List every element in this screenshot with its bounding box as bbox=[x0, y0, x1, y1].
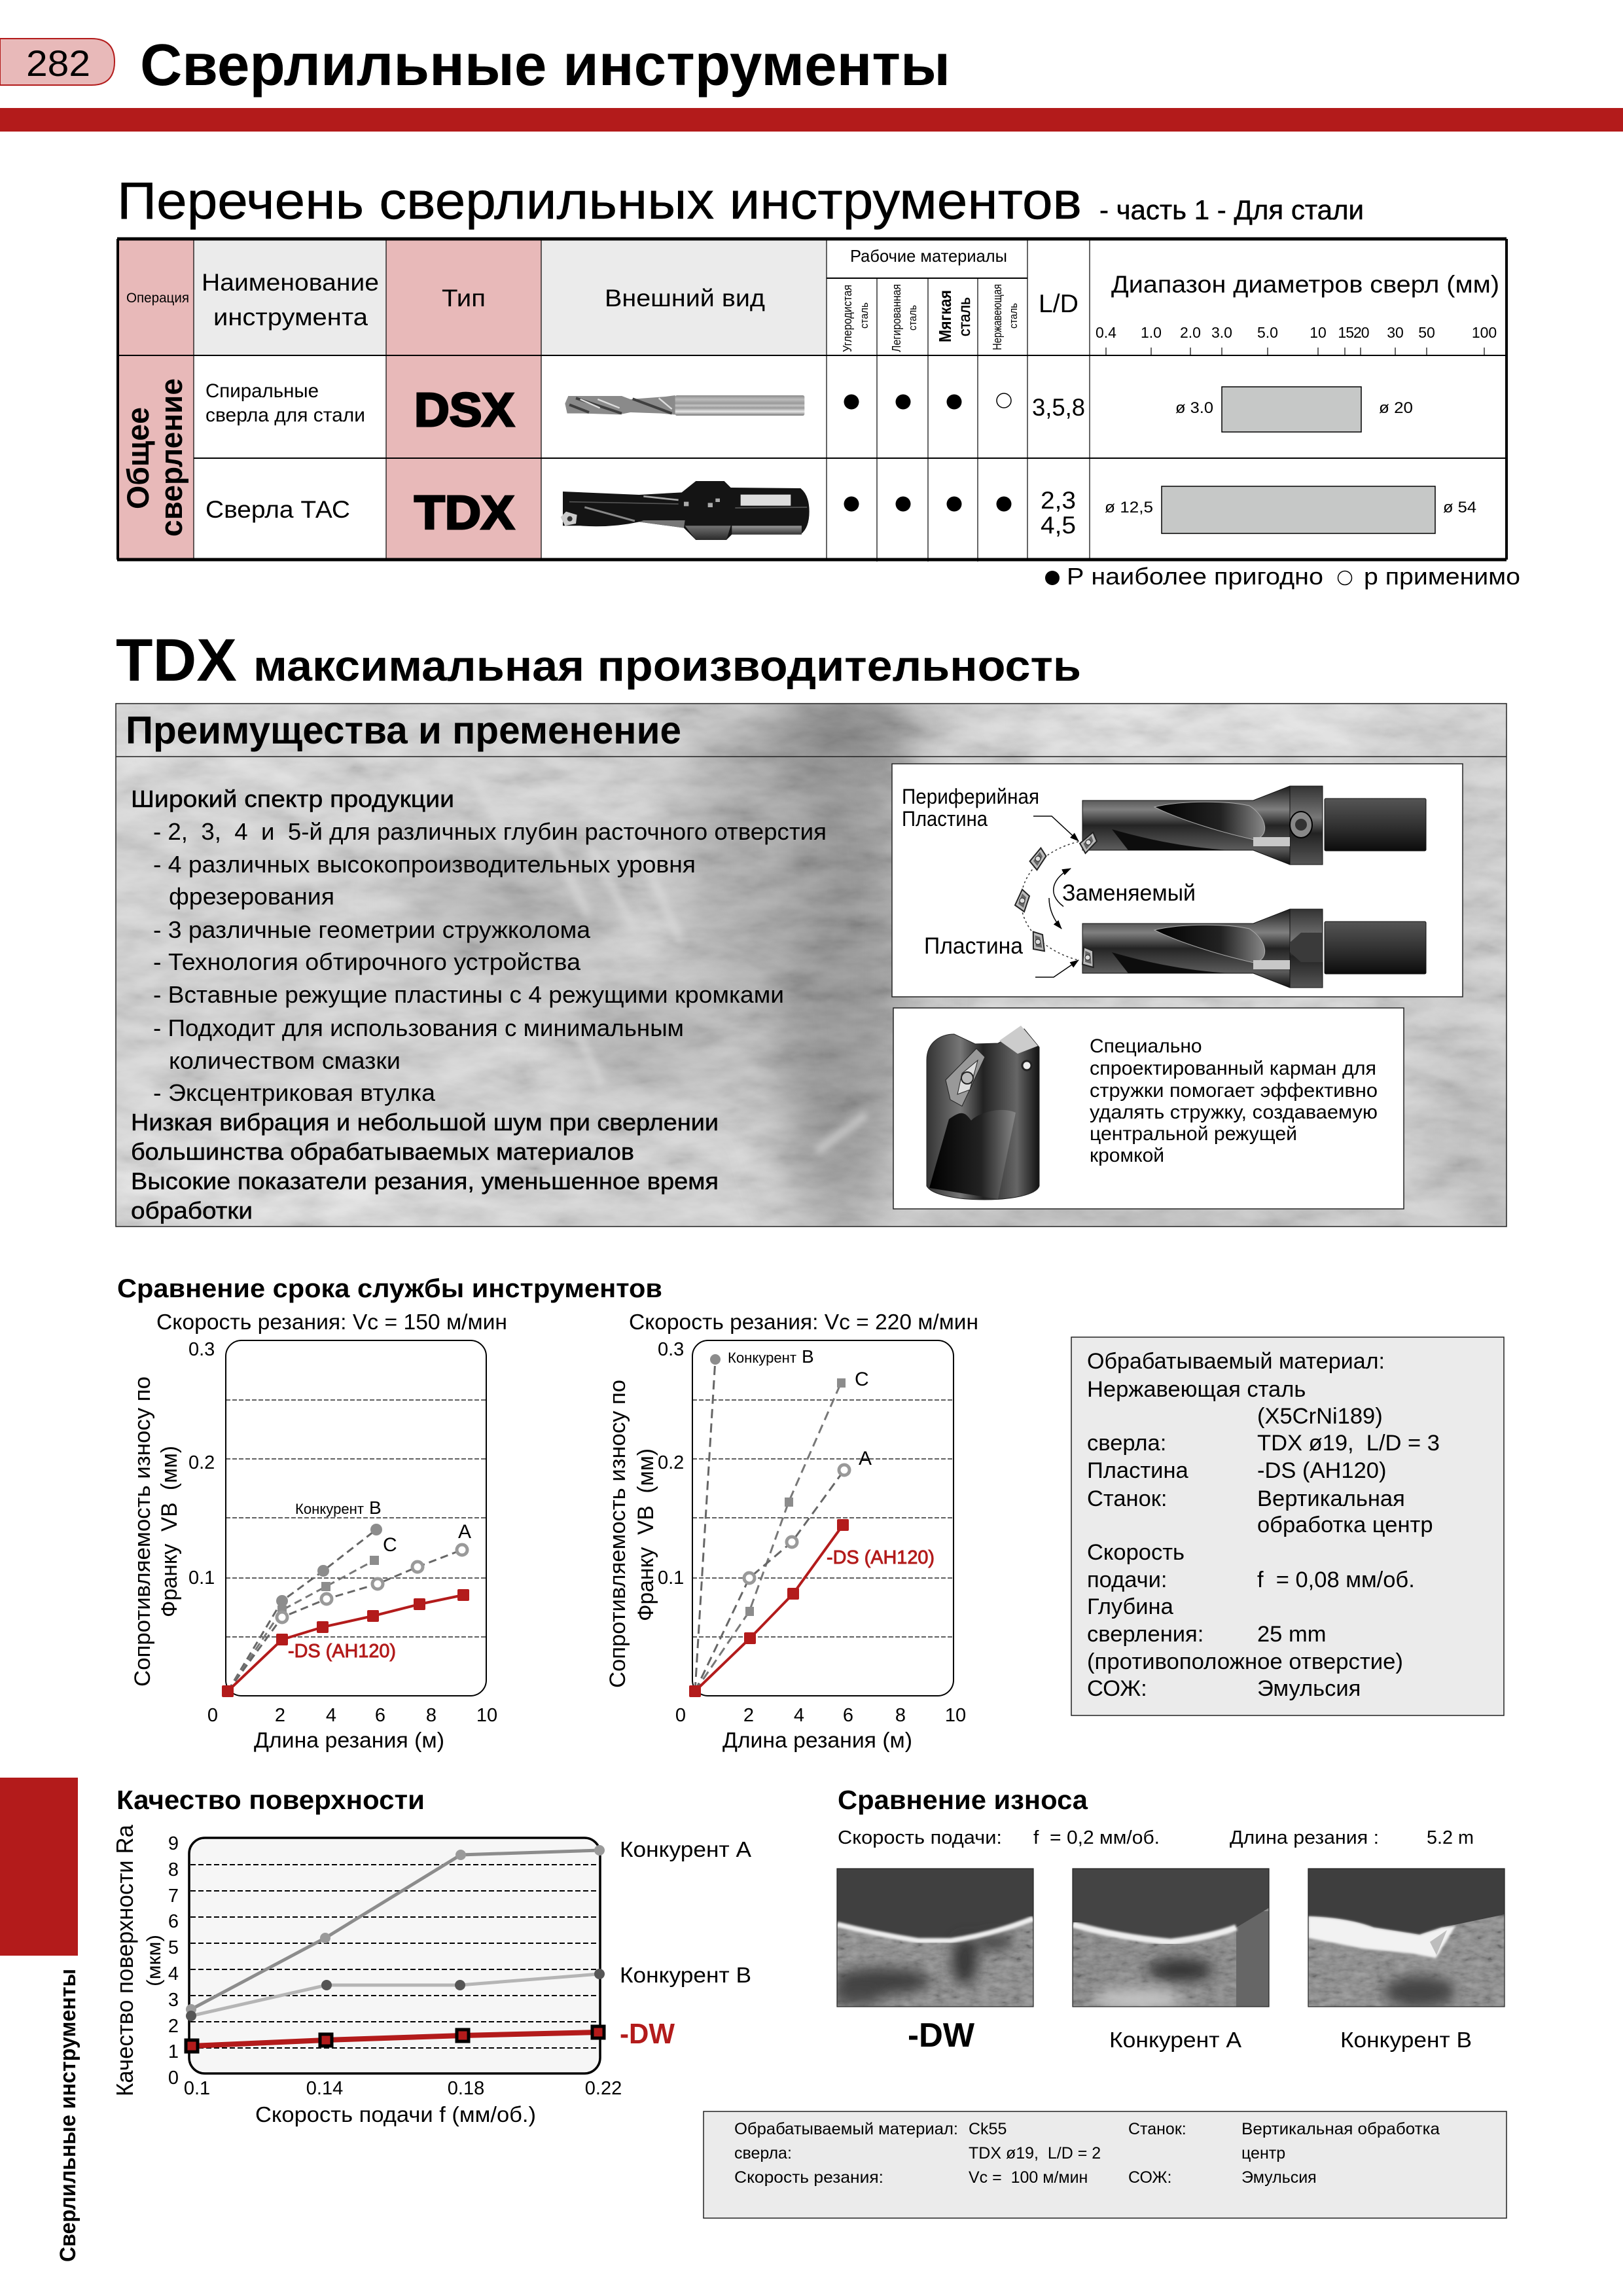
header: diameter range scale: 1520 bbox=[1338, 324, 1369, 341]
line chart: surface quality: 9 bbox=[168, 1833, 179, 1854]
series: competitor A bbox=[186, 1845, 605, 2015]
figure: replaceable inserts: Заменяемый bbox=[1062, 880, 1196, 906]
line chart: surface quality: 7 bbox=[168, 1886, 179, 1907]
series: competitor B bbox=[228, 1524, 382, 1691]
row: TDX: Сверла ТАС bbox=[205, 496, 350, 523]
header: materials: Мягкая bbox=[935, 290, 955, 342]
line chart: surface quality: 5 bbox=[168, 1937, 179, 1958]
line chart: Vc 150: 0.3 bbox=[188, 1339, 215, 1360]
header: diameter range scale: 30 bbox=[1387, 324, 1404, 341]
info box: wear test conditions: Эмульсия bbox=[1241, 2168, 1317, 2187]
info box: test conditions: подачи: bbox=[1087, 1568, 1168, 1592]
info box: test conditions: TDX ø19, L/D = 3 bbox=[1257, 1431, 1440, 1456]
wear test parameters: Длина резания : bbox=[1230, 1827, 1379, 1848]
info box: wear test conditions: TDX ø19, L/D = 2 bbox=[969, 2144, 1101, 2162]
line chart: Vc 220: 8 bbox=[895, 1705, 906, 1726]
line chart: surface quality: 0.14 bbox=[306, 2078, 343, 2099]
header: diameter range scale: 1.0 bbox=[1141, 324, 1162, 341]
heading: TDX max productivity bbox=[116, 627, 1081, 694]
figure: chip pocket: Специально bbox=[1090, 1035, 1202, 1057]
info box: test conditions: Нержавеющая сталь bbox=[1087, 1377, 1306, 1402]
info box: test conditions: Станок: bbox=[1087, 1486, 1167, 1511]
row: DSX bbox=[205, 380, 1413, 437]
line chart: Vc 150: Скорость резания: Vc = 150 м/мин bbox=[156, 1310, 507, 1334]
info box: test conditions: сверления: bbox=[1087, 1622, 1204, 1647]
header: appearance: Внешний вид bbox=[605, 285, 765, 312]
line chart: Vc 220: 0.1 bbox=[658, 1568, 684, 1588]
text block: features list: большинства обрабатываемых материалов bbox=[131, 1138, 634, 1165]
line chart: surface quality: 0.22 bbox=[585, 2078, 622, 2099]
header: type: Тип bbox=[442, 285, 486, 312]
header: diameter range scale: 50 bbox=[1418, 324, 1435, 341]
line chart: Vc 150: 6 bbox=[375, 1705, 385, 1726]
header: materials bbox=[841, 246, 1020, 352]
line chart: Vc 150: B bbox=[369, 1498, 382, 1518]
info box: test conditions: Вертикальная bbox=[1257, 1486, 1405, 1511]
line chart: surface quality: Качество поверхности Ra bbox=[111, 1824, 138, 2096]
header: materials: сталь bbox=[956, 297, 974, 336]
row: TDX: TDX bbox=[414, 487, 514, 539]
line chart: Vc 220: Франку VB (мм) bbox=[633, 1448, 658, 1621]
line chart: Vc 150: 8 bbox=[426, 1705, 437, 1726]
line chart: surface quality: 0 bbox=[168, 2068, 179, 2089]
header: operation: Операция bbox=[126, 291, 189, 306]
line chart: Vc 220: C bbox=[855, 1369, 869, 1390]
text block: features list: - Эксцентриковая втулка bbox=[153, 1079, 436, 1106]
heading: surface quality: Качество поверхности bbox=[116, 1785, 425, 1815]
info box: test conditions: 25 mm bbox=[1257, 1622, 1326, 1647]
wear test parameters: f = 0,2 мм/об. bbox=[1033, 1827, 1160, 1848]
row: DSX: сверла для стали bbox=[205, 404, 365, 426]
vertical label: general drilling: сверление bbox=[154, 378, 188, 537]
text block: features list bbox=[131, 785, 827, 1224]
text block: features list: Высокие показатели резания, уменьшенное время bbox=[131, 1168, 719, 1194]
vertical label: general drilling: Общее bbox=[120, 407, 155, 509]
header: diameter range scale: 3.0 bbox=[1211, 324, 1232, 341]
header: materials: сталь bbox=[906, 305, 919, 331]
info box: test conditions: Пластина bbox=[1087, 1458, 1188, 1483]
line chart: Vc 150: Длина резания (м) bbox=[254, 1728, 444, 1752]
line chart: Vc 220: Сопротивляемость износу по bbox=[605, 1380, 630, 1688]
info box: wear test conditions: сверла: bbox=[734, 2144, 792, 2162]
line chart: Vc 150: 0 bbox=[207, 1705, 218, 1726]
header: diameter range scale: 0.4 bbox=[1096, 324, 1116, 341]
info box: test conditions bbox=[1071, 1337, 1504, 1715]
line chart: Vc 150: Сопротивляемость износу по bbox=[130, 1376, 155, 1687]
material dots: TDX bbox=[844, 496, 1012, 512]
line chart: Vc 220: 0.2 bbox=[658, 1452, 684, 1473]
info box: test conditions: сверла: bbox=[1087, 1431, 1166, 1456]
figure: chip pocket: кромкой bbox=[1090, 1145, 1164, 1166]
info box: test conditions: Скорость bbox=[1087, 1540, 1185, 1565]
icon: TDX drill bbox=[561, 481, 810, 540]
header: materials: сталь bbox=[1007, 303, 1020, 329]
info box: wear test conditions: Ck55 bbox=[969, 2120, 1007, 2138]
line chart: Vc 150: 4 bbox=[326, 1705, 336, 1726]
line chart: surface quality: (мкм) bbox=[143, 1935, 165, 1986]
info box: wear test conditions: Обрабатываемый материал: bbox=[734, 2120, 958, 2138]
row: TDX bbox=[205, 481, 1476, 540]
side label: Сверлильные инструменты bbox=[56, 1969, 80, 2262]
line chart: Vc 150 bbox=[130, 1310, 507, 1752]
series: A bbox=[695, 1465, 849, 1691]
section heading: tool list: Перечень сверлильных инструментов bbox=[117, 171, 1082, 230]
panel heading: Преимущества и пременение bbox=[126, 709, 681, 752]
range bar: DSX: ø 3.0 bbox=[1175, 399, 1213, 417]
row: DSX: DSX bbox=[414, 384, 514, 437]
line chart: Vc 150: Конкурент bbox=[295, 1501, 364, 1517]
line chart: Vc 220 bbox=[605, 1310, 978, 1752]
line chart: Vc 150: -DS (AH120) bbox=[288, 1641, 396, 1662]
row: DSX: 3,5,8 bbox=[1032, 394, 1085, 421]
figure: chip pocket: центральной режущей bbox=[1090, 1123, 1297, 1145]
material dots: DSX bbox=[844, 393, 1011, 410]
page number badge: 282 bbox=[26, 43, 90, 84]
info box: test conditions: (X5CrNi189) bbox=[1257, 1404, 1383, 1429]
line chart: Vc 220: 0.3 bbox=[658, 1339, 684, 1360]
line chart: Vc 220: Конкурент bbox=[728, 1350, 796, 1366]
photo caption: -DW: -DW bbox=[908, 2017, 975, 2054]
icon: DSX drill bbox=[565, 395, 804, 416]
page number badge bbox=[0, 39, 115, 85]
photo: competitor B wear bbox=[1308, 1869, 1505, 2007]
header: diameter range scale: 5.0 bbox=[1257, 324, 1278, 341]
line chart: Vc 220: 4 bbox=[794, 1705, 804, 1726]
range bar: TDX: ø 12,5 bbox=[1105, 499, 1153, 516]
line chart: Vc 220: A bbox=[859, 1448, 872, 1469]
wear test parameters bbox=[838, 1827, 1474, 1848]
row: DSX: Спиральные bbox=[205, 380, 319, 402]
series: -DW bbox=[186, 2026, 604, 2052]
header: tool name: Наименование bbox=[202, 269, 379, 296]
header: L/D: L/D bbox=[1039, 290, 1079, 318]
line chart: surface quality: 4 bbox=[168, 1964, 179, 1984]
legend bbox=[1045, 563, 1520, 590]
line chart: surface quality: 1 bbox=[168, 2041, 179, 2062]
line chart: Vc 220: Длина резания (м) bbox=[722, 1728, 912, 1752]
line chart: surface quality: 0.1 bbox=[184, 2078, 210, 2099]
info box: wear test conditions bbox=[704, 2111, 1507, 2218]
text block: features list: - 4 различных высокопроизводительных уровня bbox=[153, 851, 696, 878]
header: diameter range scale bbox=[1096, 271, 1499, 355]
line chart: Vc 220: -DS (AH120) bbox=[827, 1547, 935, 1568]
legend: р применимо bbox=[1364, 563, 1520, 590]
red header bar bbox=[0, 108, 1623, 132]
series: competitor B bbox=[186, 1969, 605, 2021]
range bar: TDX: ø 54 bbox=[1443, 499, 1476, 516]
figure: chip pocket: удалять стружку, создаваемую bbox=[1090, 1102, 1378, 1123]
header: materials: Нержавеющая bbox=[991, 284, 1004, 350]
section heading: tool list: - часть 1 - Для стали bbox=[1099, 194, 1364, 225]
vertical label: general drilling bbox=[120, 378, 188, 537]
wear test parameters: Скорость подачи: bbox=[838, 1827, 1002, 1848]
line chart: Vc 150: 10 bbox=[476, 1705, 497, 1726]
series: -DS (AH120) bbox=[689, 1519, 849, 1697]
text block: features list: - Подходит для использования с минимальным bbox=[153, 1014, 684, 1041]
line chart: surface quality: 6 bbox=[168, 1911, 179, 1932]
line chart: Vc 150: A bbox=[458, 1521, 471, 1543]
info box: wear test conditions: Vc = 100 м/мин bbox=[969, 2168, 1088, 2187]
line chart: Vc 220: 10 bbox=[945, 1705, 966, 1726]
info box: test conditions: Обрабатываемый материал: bbox=[1087, 1349, 1385, 1374]
header: materials: Легированная bbox=[890, 284, 903, 352]
line chart: Vc 220: B bbox=[802, 1346, 814, 1367]
header: tool name bbox=[202, 269, 379, 331]
info box: test conditions: -DS (AH120) bbox=[1257, 1458, 1386, 1483]
info box: wear test conditions: Станок: bbox=[1128, 2120, 1186, 2138]
header: diameter range scale: 2.0 bbox=[1180, 324, 1201, 341]
figure: chip pocket bbox=[893, 1008, 1404, 1209]
line chart: Vc 150: 0.2 bbox=[188, 1452, 215, 1473]
figure: replaceable inserts: Пластина bbox=[924, 933, 1024, 959]
info box: wear test conditions: СОЖ: bbox=[1128, 2168, 1171, 2187]
range bar: DSX bbox=[1175, 387, 1413, 432]
icon: lower drill bbox=[1082, 909, 1426, 988]
wear test parameters: 5.2 m bbox=[1427, 1827, 1474, 1848]
info box: test conditions: f = 0,08 мм/об. bbox=[1257, 1568, 1415, 1592]
header: materials: сталь bbox=[858, 302, 870, 329]
range bar: DSX: ø 20 bbox=[1379, 399, 1413, 417]
series: A bbox=[228, 1545, 467, 1691]
info box: test conditions: (противоположное отверстие) bbox=[1087, 1649, 1403, 1674]
info box: test conditions: СОЖ: bbox=[1087, 1676, 1147, 1701]
heading: wear comparison: Сравнение износа bbox=[838, 1785, 1088, 1815]
info box: wear test conditions: Скорость резания: bbox=[734, 2168, 883, 2187]
line chart: Vc 150: Франку VB (мм) bbox=[157, 1446, 182, 1617]
line chart: Vc 220: 6 bbox=[843, 1705, 853, 1726]
info box: test conditions: Глубина bbox=[1087, 1594, 1174, 1619]
info box: test conditions: обработка центр bbox=[1257, 1513, 1433, 1537]
icon: upper drill bbox=[1082, 786, 1426, 865]
header: diameter range scale: 100 bbox=[1472, 324, 1497, 341]
header: diameter range scale: Диапазон диаметров сверл (мм) bbox=[1111, 271, 1499, 298]
line chart: Vc 220: 2 bbox=[743, 1705, 754, 1726]
legend: Р наиболее пригодно bbox=[1067, 563, 1323, 590]
text block: features list: - Вставные режущие пластины с 4 режущими кромками bbox=[153, 981, 784, 1008]
icon: drill head bbox=[927, 1026, 1039, 1200]
text block: features list: количеством смазки bbox=[169, 1047, 401, 1074]
heading: TDX max productivity: максимальная производительность bbox=[253, 641, 1081, 690]
photo caption: competitor B: Конкурент В bbox=[1340, 2028, 1472, 2052]
panel: advantages and applications bbox=[115, 703, 1507, 1227]
photo caption: competitor A: Конкурент А bbox=[1109, 2028, 1241, 2052]
line chart: Vc 220: Скорость резания: Vc = 220 м/мин bbox=[629, 1310, 978, 1334]
info box: wear test conditions: Вертикальная обработка bbox=[1241, 2120, 1440, 2138]
text block: features list: фрезерования bbox=[169, 883, 334, 910]
line chart: surface quality: Конкурент А bbox=[620, 1837, 751, 1861]
row: TDX: 2,3 bbox=[1041, 487, 1076, 514]
header: materials: Углеродистая bbox=[841, 285, 854, 352]
line chart: Vc 220: 0 bbox=[675, 1705, 686, 1726]
series: C bbox=[695, 1378, 846, 1691]
text block: features list: обработки bbox=[131, 1197, 253, 1224]
line chart: surface quality: 0.18 bbox=[448, 2078, 484, 2099]
series: C bbox=[228, 1556, 379, 1691]
heading: tool life comparison: Сравнение срока службы инструментов bbox=[117, 1274, 662, 1303]
line chart: Vc 150: 0.1 bbox=[188, 1568, 215, 1588]
header: tool name: инструмента bbox=[213, 304, 368, 331]
info box: test conditions: Эмульсия bbox=[1257, 1676, 1361, 1701]
range bar: TDX bbox=[1105, 486, 1476, 533]
photo: -DW wear bbox=[830, 1869, 1033, 2007]
line chart: surface quality bbox=[111, 1824, 751, 2126]
line chart: surface quality: Конкурент В bbox=[620, 1963, 751, 1987]
text block: features list: Широкий спектр продукции bbox=[131, 785, 454, 812]
row: TDX: 4,5 bbox=[1041, 512, 1076, 539]
line chart: surface quality: Скорость подачи f (мм/об.) bbox=[255, 2102, 536, 2126]
photo: competitor A wear bbox=[1073, 1869, 1269, 2010]
figure: chip pocket: стружки помогает эффективно bbox=[1090, 1080, 1378, 1102]
text block: features list: - 2, 3, 4 и 5-й для различных глубин расточного отверстия bbox=[153, 818, 827, 845]
side tab: red block bbox=[0, 1778, 78, 1956]
text block: features list: Низкая вибрация и небольшой шум при сверлении bbox=[131, 1109, 719, 1136]
heading: TDX max productivity: TDX bbox=[116, 627, 237, 694]
figure: chip pocket: спроектированный карман для bbox=[1090, 1058, 1376, 1079]
line chart: Vc 150: 2 bbox=[275, 1705, 285, 1726]
line chart: Vc 150: C bbox=[383, 1534, 397, 1556]
figure: replaceable inserts: Пластина bbox=[902, 807, 988, 831]
text block: features list: - 3 различные геометрии стружколома bbox=[153, 916, 591, 943]
series: competitor B bbox=[695, 1354, 721, 1691]
text block: features list: - Технология обтирочного устройства bbox=[153, 948, 581, 975]
header: diameter range scale: 10 bbox=[1310, 324, 1327, 341]
series: -DS (AH120) bbox=[222, 1589, 469, 1697]
line chart: surface quality: 2 bbox=[168, 2016, 179, 2037]
table: drilling tools bbox=[117, 239, 1507, 562]
figure: replaceable inserts: Периферийная bbox=[902, 785, 1039, 808]
figure: replaceable inserts bbox=[892, 764, 1463, 997]
header: materials: Рабочие материалы bbox=[850, 246, 1007, 266]
line chart: surface quality: 3 bbox=[168, 1990, 179, 2011]
line chart: surface quality: -DW bbox=[620, 2018, 675, 2050]
info box: wear test conditions: центр bbox=[1241, 2144, 1285, 2162]
line chart: surface quality: 8 bbox=[168, 1859, 179, 1880]
title: Сверлильные инструменты bbox=[140, 33, 950, 98]
